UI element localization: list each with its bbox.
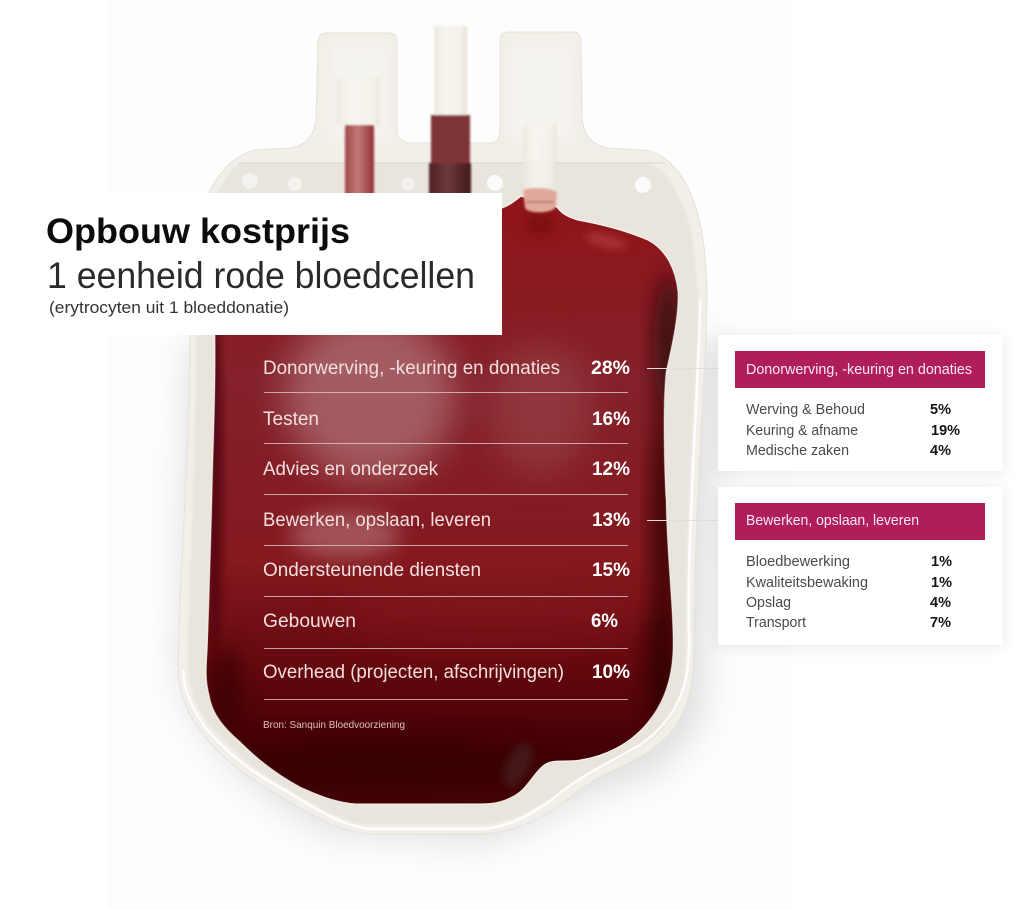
details rows: Bloedbewerking bbox=[746, 554, 850, 570]
panel: Donorwerving details bbox=[718, 335, 1003, 471]
panel header: Bewerken, opslaan, leveren bbox=[746, 513, 919, 529]
connector 2 bbox=[647, 520, 718, 522]
details rows: 5% bbox=[930, 402, 951, 418]
row: Advies: 12% bbox=[592, 459, 630, 480]
panel header bbox=[735, 351, 985, 388]
row: Bewerken: 13% bbox=[592, 510, 630, 531]
details rows bbox=[746, 402, 960, 459]
row: Gebouwen: 6% bbox=[591, 611, 618, 632]
blood bbox=[205, 195, 678, 804]
row: Overhead: Overhead (projecten, afschrijvingen) bbox=[263, 661, 564, 683]
details rows: 1% bbox=[931, 554, 952, 570]
details rows: Medische zaken bbox=[746, 443, 849, 459]
blood shading bbox=[207, 213, 682, 796]
row: Testen: 16% bbox=[592, 409, 630, 430]
details rows: 7% bbox=[930, 615, 951, 631]
row: Advies: Advies en onderzoek bbox=[263, 458, 438, 480]
details rows: Transport bbox=[746, 615, 806, 631]
panel header bbox=[735, 503, 985, 540]
note: (erytrocyten uit 1 bloeddonatie) bbox=[49, 298, 289, 317]
row: Gebouwen bbox=[263, 610, 618, 632]
heading: Opbouw kostprijs bbox=[46, 212, 350, 251]
connector 1 bbox=[647, 368, 718, 370]
blood bag illustration bbox=[178, 26, 707, 834]
subheading: 1 eenheid rode bloedcellen bbox=[47, 255, 475, 296]
bag inner band bbox=[188, 163, 698, 825]
fill holes bbox=[242, 173, 651, 193]
row: Testen bbox=[263, 408, 630, 430]
left tube bbox=[336, 78, 380, 195]
row: Ondersteunende: Ondersteunende diensten bbox=[263, 559, 481, 581]
bag plastic body bbox=[178, 32, 707, 834]
details rows: Keuring & afname bbox=[746, 423, 858, 439]
source: Bron: Sanquin Bloedvoorziening bbox=[263, 719, 405, 731]
bag shadow bbox=[180, 340, 718, 842]
row: Overhead: 10% bbox=[592, 662, 630, 683]
right tube bbox=[523, 125, 557, 212]
panel: Bewerken details bbox=[718, 487, 1003, 645]
details rows: 19% bbox=[931, 423, 960, 439]
title block bbox=[0, 193, 502, 335]
details rows: 4% bbox=[930, 443, 951, 459]
row: Ondersteunende bbox=[263, 559, 630, 581]
details rows: Opslag bbox=[746, 595, 791, 611]
bag inner seam bbox=[183, 300, 700, 829]
row: Testen: Testen bbox=[263, 408, 319, 430]
details rows: Kwaliteitsbewaking bbox=[746, 575, 868, 591]
panel header: Donorwerving, -keuring en donaties bbox=[746, 362, 972, 378]
details rows: Werving & Behoud bbox=[746, 402, 865, 418]
row: Advies bbox=[263, 458, 630, 480]
details rows: 1% bbox=[931, 575, 952, 591]
row: Bewerken: Bewerken, opslaan, leveren bbox=[263, 509, 491, 531]
details rows: 4% bbox=[930, 595, 951, 611]
details rows bbox=[746, 554, 952, 631]
row: Bewerken bbox=[263, 509, 630, 531]
row: Ondersteunende: 15% bbox=[592, 560, 630, 581]
tab highlights bbox=[330, 45, 570, 140]
cost table bbox=[263, 357, 630, 683]
row: Donorwerving: 28% bbox=[591, 358, 630, 379]
seal strip bbox=[238, 162, 665, 164]
row: Donorwerving: Donorwerving, -keuring en donaties bbox=[263, 357, 560, 379]
background panel bbox=[108, 0, 790, 910]
row: Gebouwen: Gebouwen bbox=[263, 610, 356, 632]
center tube bbox=[429, 26, 471, 195]
